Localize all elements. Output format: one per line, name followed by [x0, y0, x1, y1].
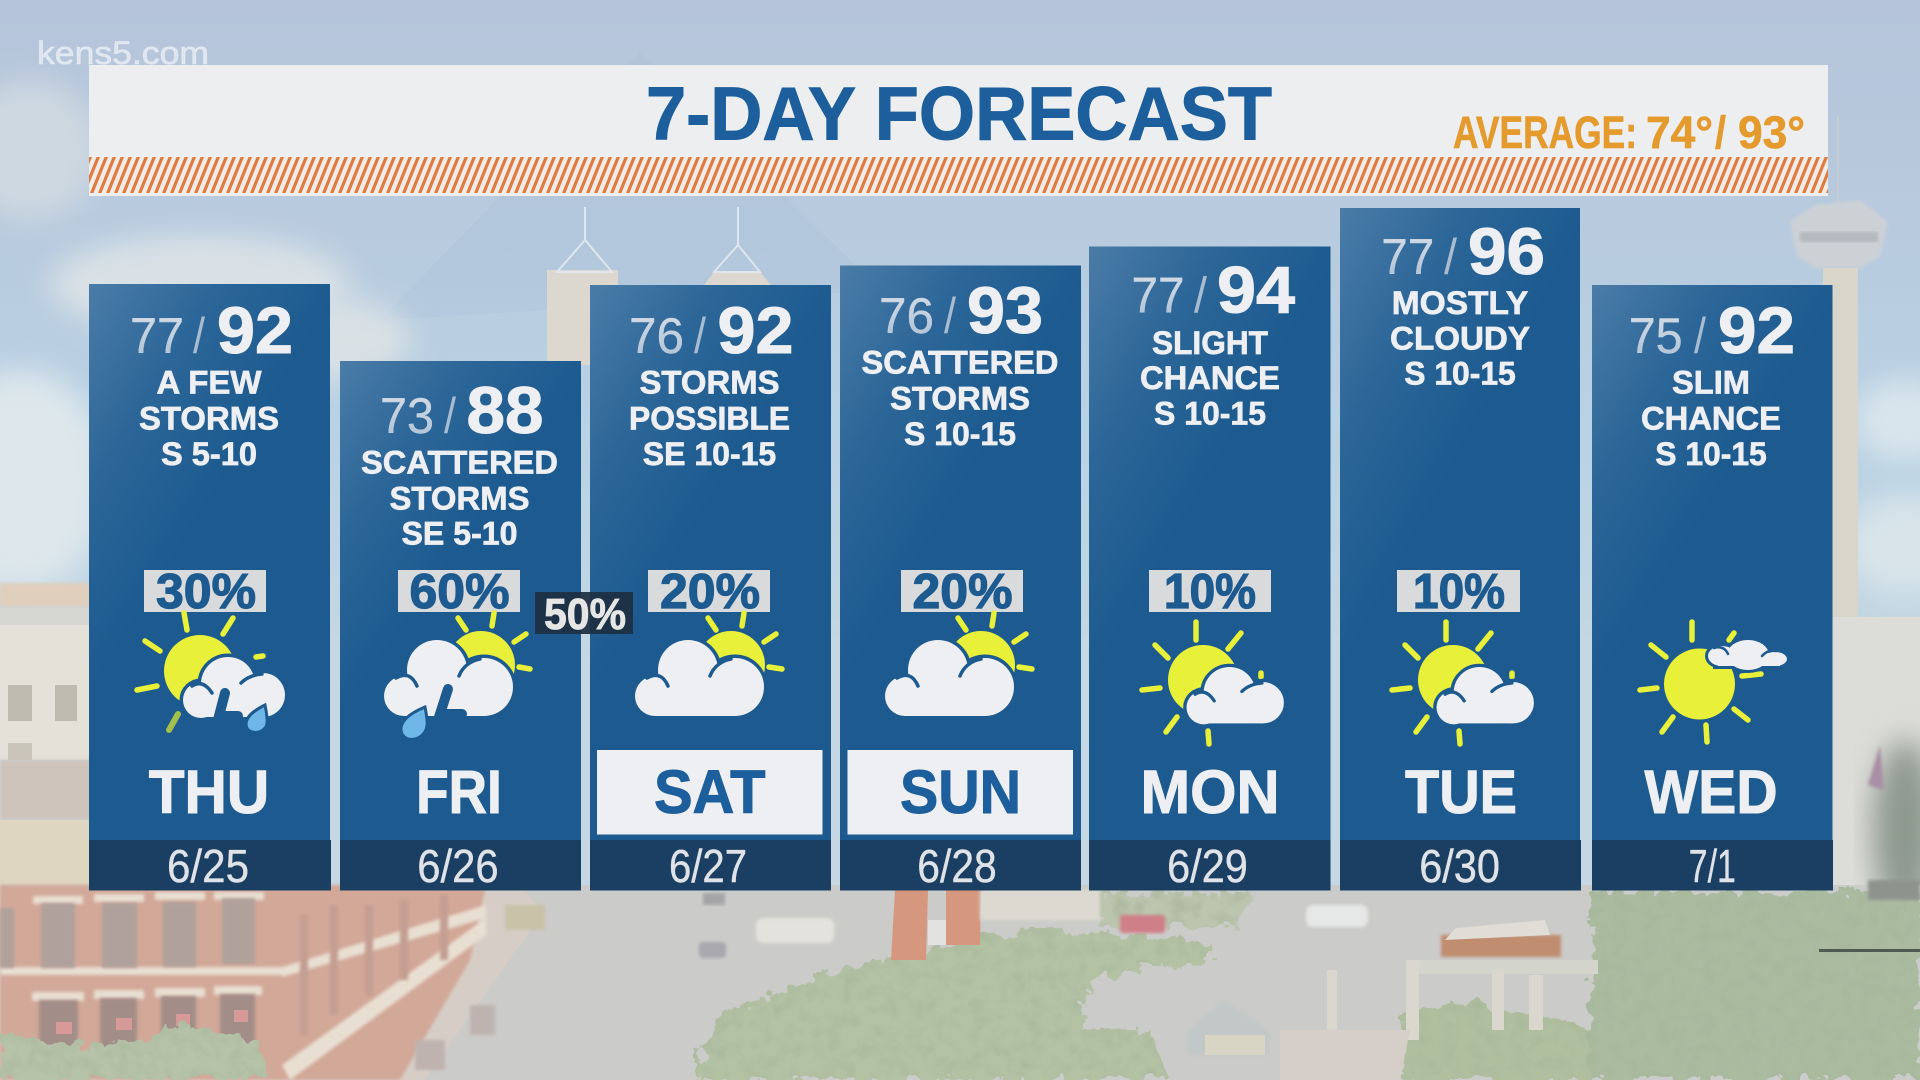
average temperatures [1453, 107, 1805, 158]
conditions and wind: S 10-15 [904, 416, 1016, 452]
panel: Sunday [840, 266, 1081, 892]
temperature low/high: / [193, 308, 205, 364]
date bar: 6/28 [917, 840, 997, 892]
street details [891, 890, 928, 960]
conditions and wind: CHANCE [1641, 400, 1781, 436]
date bar [1089, 840, 1330, 892]
conditions and wind [1390, 285, 1530, 392]
towers behind panels [547, 115, 1888, 618]
temperature low/high: 93 [967, 273, 1043, 347]
date bar [590, 840, 831, 892]
street and facade [0, 885, 1920, 1080]
day label: MON [1140, 758, 1280, 826]
temperature low/high [1381, 214, 1545, 288]
conditions and wind [361, 444, 558, 552]
date bar: 6/26 [417, 840, 499, 892]
precipitation chance: 20% [912, 565, 1012, 619]
header bar [89, 65, 1828, 196]
precipitation chance: 60% [410, 565, 510, 619]
temperature low/high: / [444, 388, 456, 444]
average temperatures: 93° [1738, 107, 1805, 158]
day label on white highlight [597, 750, 822, 834]
temperature low/high: / [1194, 268, 1207, 324]
date bar [1340, 840, 1581, 892]
date bar [840, 840, 1081, 892]
date bar: 7/1 [1689, 840, 1736, 892]
panel: Monday [1089, 246, 1330, 892]
precipitation chance: 10% [1164, 565, 1256, 619]
temperature low/high: 76 [629, 308, 684, 364]
conditions and wind: STORMS [390, 480, 530, 516]
icon: mostly sunny [1640, 622, 1787, 742]
trees [693, 927, 1211, 1080]
temperature low/high: 77 [1132, 268, 1184, 324]
temperature low/high: 92 [1718, 293, 1795, 367]
temperature low/high [1132, 253, 1295, 327]
temperature low/high: / [694, 308, 706, 364]
temperature low/high: 88 [466, 373, 544, 447]
panel: Thursday [89, 284, 331, 892]
conditions and wind: STORMS [139, 400, 279, 436]
temperature low/high: 77 [130, 308, 184, 364]
day label: THU [149, 758, 269, 826]
temperature low/high [380, 373, 544, 447]
temperature low/high: 73 [380, 388, 434, 444]
panel: Wednesday [1592, 285, 1833, 892]
conditions and wind: MOSTLY [1392, 285, 1529, 321]
precipitation chance: 10% [1413, 565, 1505, 619]
conditions and wind: S 5-10 [161, 436, 257, 472]
temperature low/high: 76 [879, 288, 934, 344]
temperature low/high: 92 [217, 293, 293, 367]
temperature low/high [1629, 293, 1795, 367]
day label: TUE [1405, 758, 1517, 826]
average temperatures: / [1715, 107, 1726, 158]
temperature low/high: 92 [718, 293, 794, 367]
conditions and wind [139, 365, 279, 472]
date bar [89, 840, 331, 892]
title: 7-DAY FORECAST [646, 72, 1272, 156]
conditions and wind [1140, 325, 1280, 432]
temperature low/high: / [944, 288, 956, 344]
conditions and wind: POSSIBLE [629, 400, 790, 436]
panel: Tuesday [1340, 208, 1581, 892]
precipitation chance: 30% [156, 565, 256, 619]
icon: sun behind cloud [635, 613, 782, 716]
icon: sun with storm cloud [137, 613, 285, 732]
right building and trees [1832, 617, 1920, 920]
icon: sun with cloud [1392, 622, 1534, 744]
conditions and wind: S 10-15 [1404, 356, 1516, 392]
conditions and wind [629, 365, 790, 472]
conditions and wind: S 10-15 [1655, 436, 1767, 472]
conditions and wind: A FEW [156, 365, 262, 401]
date bar [1592, 840, 1833, 892]
watermark: kens5.com: kens5.com [37, 35, 209, 71]
icon: sun behind storm cloud [384, 613, 530, 739]
date bar [340, 840, 581, 892]
conditions and wind: SLIM [1672, 365, 1750, 401]
conditions and wind: SLIGHT [1152, 325, 1268, 361]
conditions and wind: S 10-15 [1154, 396, 1266, 432]
date bar: 6/27 [669, 840, 747, 892]
temperature low/high: 94 [1217, 253, 1295, 327]
sidewalk pedestrians [415, 905, 545, 1070]
precipitation chance: 20% [660, 565, 760, 619]
date bar: 6/30 [1419, 840, 1500, 892]
temperature low/high [629, 293, 794, 367]
conditions and wind: SE 10-15 [643, 436, 776, 472]
conditions and wind [1641, 365, 1781, 472]
date bar: 6/29 [1167, 840, 1248, 892]
callout: 50% previous chance: 50% [544, 590, 626, 639]
temperature low/high [879, 273, 1043, 347]
conditions and wind: SCATTERED [862, 345, 1058, 381]
conditions and wind: SE 5-10 [402, 516, 518, 552]
average temperatures: AVERAGE: [1453, 107, 1637, 158]
conditions and wind: CHANCE [1140, 360, 1280, 396]
icon: sun behind cloud [885, 613, 1032, 716]
conditions and wind: CLOUDY [1390, 320, 1530, 356]
day label: FRI [416, 758, 502, 826]
day label: WED [1644, 758, 1778, 826]
day label on white highlight [848, 750, 1073, 834]
panel: Saturday [590, 285, 831, 892]
icon: sun with cloud [1142, 622, 1284, 744]
striped band [89, 157, 1828, 193]
left building [0, 583, 95, 885]
temperature low/high: / [1444, 229, 1457, 285]
date bar: 6/25 [167, 840, 249, 892]
temperature low/high: / [1694, 308, 1706, 364]
panel: Friday [340, 361, 581, 892]
day label on white highlight: SUN [900, 758, 1021, 826]
conditions and wind: SCATTERED [361, 444, 558, 480]
conditions and wind: STORMS [890, 381, 1030, 417]
temperature low/high: 96 [1468, 214, 1545, 288]
temperature low/high [130, 293, 293, 367]
conditions and wind [862, 345, 1058, 452]
temperature low/high: 77 [1381, 229, 1434, 285]
temperature low/high: 75 [1629, 308, 1683, 364]
day label on white highlight: SAT [654, 758, 765, 826]
average temperatures: 74° [1646, 107, 1713, 158]
conditions and wind: STORMS [640, 365, 780, 401]
